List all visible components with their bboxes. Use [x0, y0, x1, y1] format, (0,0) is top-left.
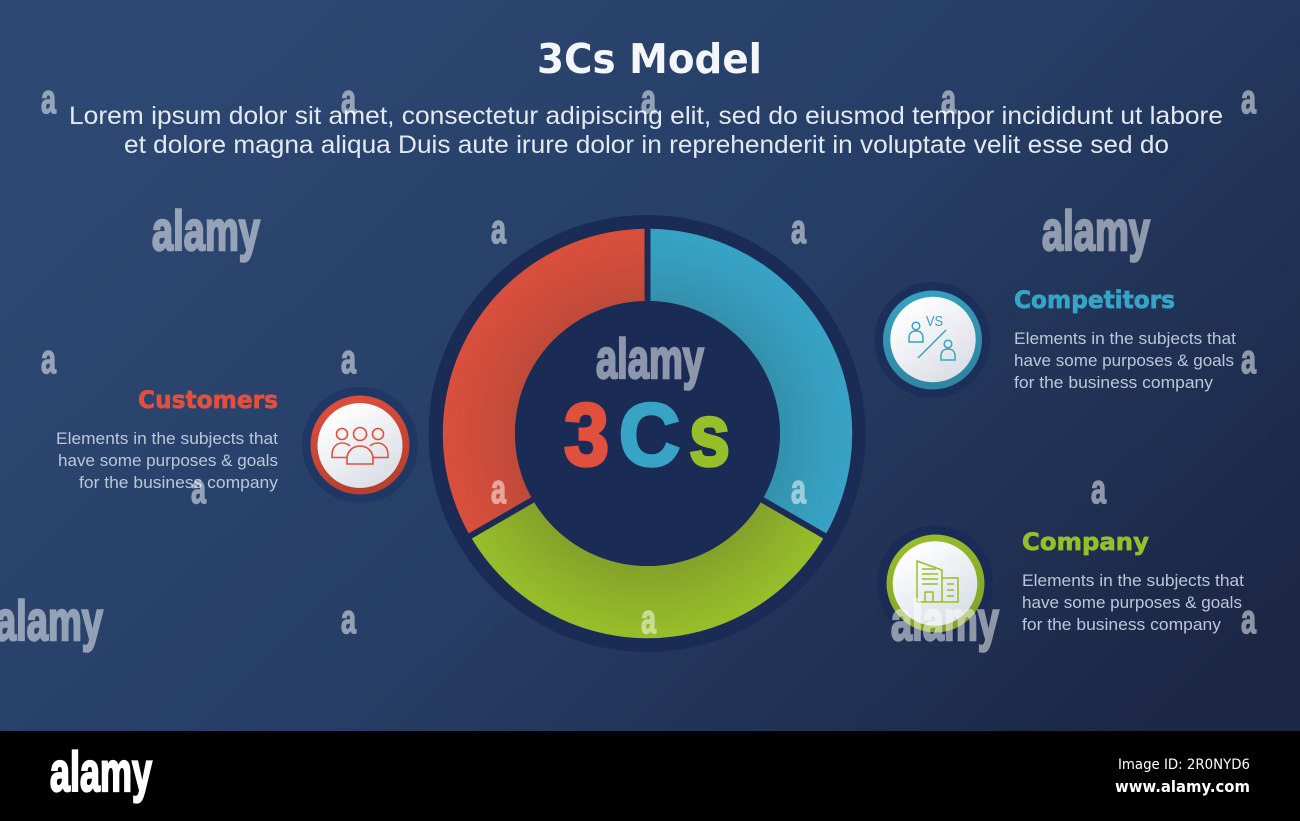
centre label: 3Cs: 3: [564, 385, 609, 484]
watermarks: alamy: [891, 589, 999, 652]
watermarks: a: [1241, 76, 1257, 122]
icon: person versus person: [909, 322, 955, 360]
donut chart: 3Cs: [428, 215, 866, 652]
watermarks: a: [341, 76, 357, 122]
customers description: [56, 429, 279, 492]
watermarks: a: [1091, 466, 1107, 512]
watermarks: a: [941, 76, 957, 122]
footer bar: [0, 731, 1300, 821]
company description: Elements in the subjects that: [1022, 571, 1244, 590]
icon: office buildings: [917, 561, 958, 602]
company badge: [877, 526, 993, 642]
intro text: [69, 102, 1223, 159]
competitors badge: [874, 282, 990, 398]
watermarks: alamy: [1042, 199, 1150, 262]
competitors description: [1014, 329, 1236, 392]
icon: vs label: VS: [926, 313, 943, 330]
watermarks: a: [191, 466, 207, 512]
customers description: have some purposes & goals: [58, 451, 278, 470]
centre label: 3Cs: C: [619, 385, 680, 484]
customers description: Elements in the subjects that: [56, 429, 278, 448]
centre label: 3Cs: s: [689, 385, 730, 484]
watermarks: a: [1241, 336, 1257, 382]
footer logo: alamy: [50, 740, 152, 803]
watermarks: a: [641, 76, 657, 122]
watermarks: a: [41, 76, 57, 122]
watermarks: a: [1241, 596, 1257, 642]
intro text: Lorem ipsum dolor sit amet, consectetur adipiscing elit, sed do eiusmod tempor incididunt ut labore: [69, 102, 1223, 130]
segment: customers red: [443, 229, 648, 536]
watermarks: a: [791, 206, 807, 252]
watermarks: [0, 76, 1257, 652]
segment: company green: [470, 500, 825, 638]
competitors heading: Competitors: [1014, 286, 1175, 314]
website: www.alamy.com: [1115, 777, 1250, 796]
customers heading: Customers: [138, 386, 278, 414]
company description: [1022, 571, 1244, 634]
watermarks: a: [341, 596, 357, 642]
intro text: et dolore magna aliqua Duis aute irure dolor in reprehenderit in voluptate velit esse sed do: [124, 131, 1169, 159]
competitors description: Elements in the subjects that: [1014, 329, 1236, 348]
item: customers: [56, 386, 418, 503]
title: 3Cs Model: [537, 35, 762, 83]
icon: three people: [332, 428, 388, 464]
watermarks: a: [791, 466, 807, 512]
centre disc: [515, 301, 780, 566]
watermarks: a: [41, 336, 57, 382]
watermarks: a: [491, 206, 507, 252]
segment: competitors blue: [648, 229, 852, 536]
centre label: 3Cs: [564, 385, 730, 484]
competitors description: have some purposes & goals: [1014, 351, 1234, 370]
watermarks: alamy: [152, 199, 260, 262]
item: competitors: [874, 282, 1236, 398]
company heading: Company: [1022, 528, 1149, 556]
customers description: for the business company: [79, 473, 279, 492]
company description: for the business company: [1022, 615, 1222, 634]
watermarks: a: [491, 466, 507, 512]
watermarks: a: [641, 596, 657, 642]
item: company: [877, 526, 1244, 642]
image id: Image ID: 2R0NYD6: [1118, 757, 1250, 773]
customers badge: [302, 387, 418, 503]
segment gaps: [465, 222, 830, 539]
watermarks: alamy: [596, 327, 704, 390]
company description: have some purposes & goals: [1022, 593, 1242, 612]
watermarks: a: [341, 336, 357, 382]
competitors description: for the business company: [1014, 373, 1214, 392]
